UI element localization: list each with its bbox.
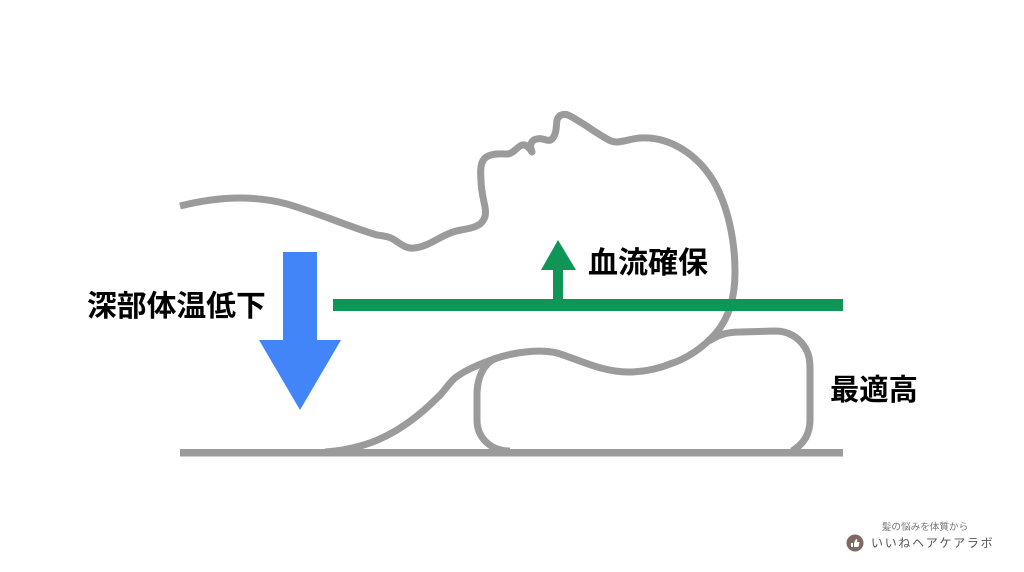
logo name: いいねヘアケアラボ — [871, 536, 994, 550]
pillow outline — [477, 331, 810, 451]
green level line — [333, 299, 843, 311]
baseline — [180, 449, 843, 456]
green up arrow — [541, 240, 576, 301]
label: blood flow: 血流確保 — [588, 247, 708, 280]
blue down arrow — [259, 252, 341, 410]
label: deep body temperature drop: 深部体温低下 — [87, 290, 266, 323]
logo icon — [846, 534, 864, 552]
body and head outline — [180, 114, 735, 452]
label: optimal height: 最適高 — [830, 374, 918, 407]
logo tagline: 髪の悩みを体質から — [882, 521, 968, 533]
